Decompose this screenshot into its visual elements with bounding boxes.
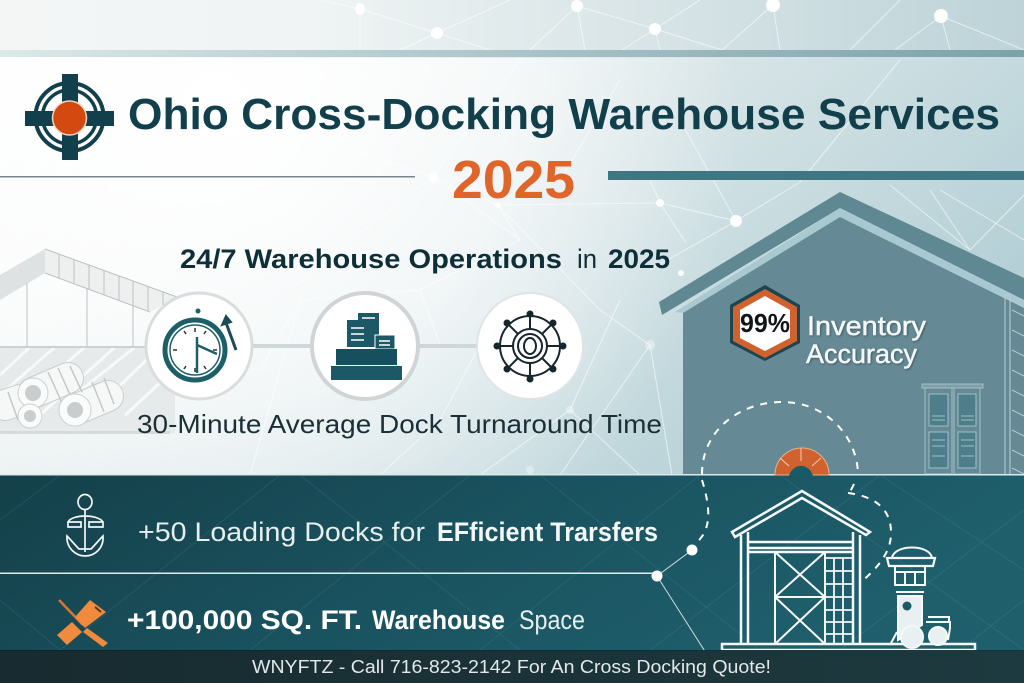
text: loading docks: +50 Loading Docks for	[138, 517, 425, 547]
orange half ring	[775, 448, 829, 476]
icon: anchor	[67, 494, 103, 556]
line-art guard tower	[887, 548, 950, 648]
text: loading docks	[138, 517, 658, 547]
side stair	[1005, 295, 1024, 475]
label: inventory accuracy	[806, 311, 927, 369]
icon: stopwatch	[146, 293, 252, 399]
label: inventory accuracy: Inventory	[807, 311, 927, 341]
logo	[25, 74, 114, 160]
caption: dock turnaround: 30-Minute Average Dock Turnaround Time	[137, 409, 662, 439]
double door	[922, 384, 983, 474]
text: loading docks: EFficient Trarsfers	[437, 517, 658, 547]
dashed route	[692, 402, 891, 583]
cable rolls	[5, 366, 114, 428]
background	[0, 0, 1024, 476]
heading: operations: in	[577, 244, 597, 274]
badge: 99%: 99%	[740, 308, 790, 338]
text: warehouse space: +100,000 SQ. FT.	[127, 605, 362, 635]
heading: operations: 2025	[608, 244, 670, 274]
heading: operations: 24/7 Warehouse Operations	[180, 244, 562, 274]
top band	[0, 50, 1024, 57]
footer bar: WNYFTZ - Call 716-823-2142 For An Cross Docking Quote!	[252, 657, 771, 677]
icon: crossed tools	[57, 600, 108, 647]
text: warehouse space	[127, 605, 585, 635]
warehouse building	[659, 192, 1024, 476]
title: Ohio Cross-Docking Warehouse Services	[128, 90, 1000, 139]
icon: network wheel	[477, 293, 583, 399]
text: warehouse space: Space	[519, 605, 585, 635]
year: 2025	[452, 150, 575, 210]
badge: 99%	[730, 285, 800, 361]
connector lines	[0, 544, 975, 653]
bottom panel	[0, 475, 1024, 651]
background warehouse sketch	[0, 249, 185, 434]
footer bar	[0, 650, 1024, 683]
label: inventory accuracy: Accuracy	[806, 339, 917, 369]
text: warehouse space: Warehouse	[372, 605, 505, 635]
line-art warehouse	[722, 491, 975, 655]
icon: stacked documents	[312, 293, 418, 399]
